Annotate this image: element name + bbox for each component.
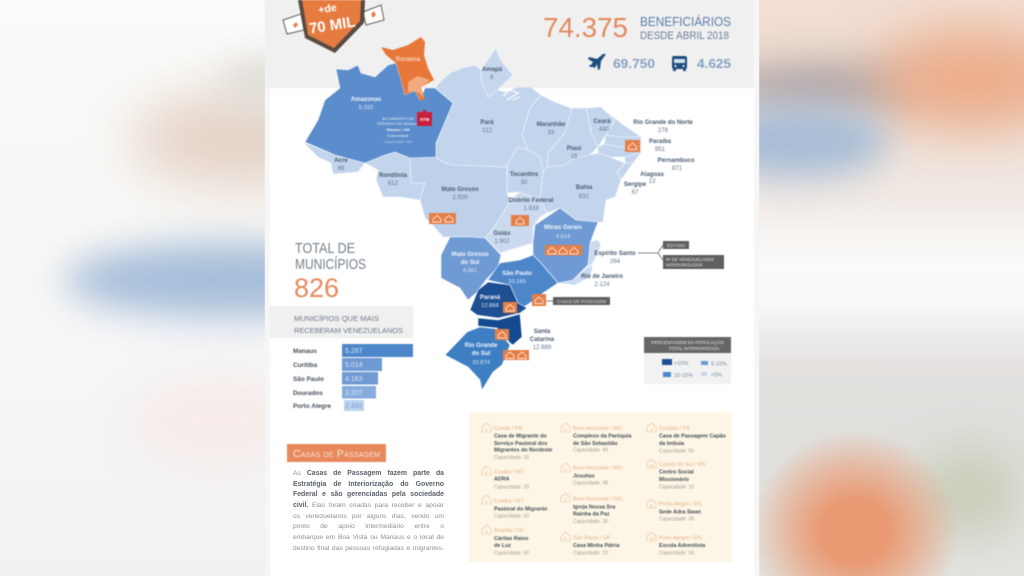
shelter 5: Capacidade: 40 [573,448,608,454]
shelter 7: Belo Horizonte / MG [573,496,623,502]
shelter 7 [561,493,623,525]
shelter 12: Escola Adventista [659,543,706,549]
callout: Manaus shelter: ALOJAMENTO DE [382,117,414,121]
shelter 10: 10 [649,463,654,468]
shelter 9: 9 [650,427,653,432]
shelter 2: Cuiabá / MT [494,469,525,475]
bar: São Paulo: São Paulo [293,376,324,383]
bar: Curitiba [293,358,382,371]
shelter 9: Curitiba / PR [659,426,690,432]
icon: shelter tag Minas Gerais [545,245,582,256]
shelter 8: Capacidade: 20 [573,550,608,556]
state labels: Catarina [530,336,555,343]
bar: Curitiba: 5.014 [345,362,363,369]
shelter 3 [482,495,547,520]
heading: total de municípios [295,240,366,273]
shelter 11: Sede Adra Swan [659,509,701,515]
bar: Manaus: Manaus [293,348,317,355]
shelter 7: Capacidade: 30 [573,519,608,525]
bar: Manaus [293,344,413,357]
shelter 5: de São Sebastião [573,441,618,447]
state labels: 10.874 [472,360,491,366]
bar: Dourados: 3.207 [345,390,363,397]
state labels: Mato Grosso [451,251,489,258]
bar: Manaus: 5.287 [345,348,363,355]
shelter 1 [482,423,552,461]
icon: shelter tag Rio Grande do Sul east [503,350,529,360]
callout: Manaus shelter [377,117,420,144]
shelter 1: Conde / PB [494,426,522,432]
shelter 6: Jesuítas [573,473,595,479]
state labels: 1.902 [494,238,510,245]
headline figure: DESDE ABRIL 2018 [640,30,729,42]
state: São Paulo [488,255,558,308]
legend: percentage of population: PERCENTAGEM DA POPULAÇÃO [651,339,724,345]
state labels: Pará [480,119,494,126]
icon: shelter tag Distrito Federal [511,215,529,226]
state labels: 1.933 [523,205,539,212]
state labels: Tocantins [510,171,539,178]
shelter 3: Pastoral do Migrante [494,507,547,513]
state: Bahia [540,153,625,222]
state labels: Santa [534,328,551,335]
headline figure: 74.375 [543,12,628,43]
state labels: 12.868 [481,303,499,309]
shelter 3: Cuiabá / MT [494,498,525,504]
state: Roraima [381,37,434,100]
state labels: Rio Grande [465,342,498,349]
state labels: 440 [599,126,610,133]
state labels: Espírito Santo [594,250,636,257]
shelter 10: Missionário [659,477,690,483]
shelter 12: 12 [649,536,654,541]
shelter 3: Capacidade: 20 [494,514,529,520]
shelter 5: Belo Horizonte / MG [573,426,623,432]
bar: Porto Alegre [293,400,364,411]
shelter 5: Complexo da Paróquia [573,434,632,440]
state: Tocantins [507,147,543,200]
state labels: Distrito Federal [509,197,554,204]
state labels: Minas Gerais [544,224,583,231]
shelter 2: Capacidade: 20 [494,484,529,490]
subheading strip: MUNICÍPIOS QUE MAIS [294,314,379,323]
shelter 11: Capacidade: 30 [659,517,694,523]
state labels [334,56,695,366]
shelter 1: Migrantes do Nordeste [494,448,552,454]
shelter 3: 3 [485,499,488,504]
bar: São Paulo [293,372,378,384]
shelter 10: Capacidade: 10 [659,484,694,490]
state: Pará [435,65,541,167]
state labels: 812 [388,180,399,187]
state labels: 4.561 [463,268,477,274]
key: state and count tags: ESTADO [667,243,686,248]
state labels: 10.189 [508,279,526,285]
state labels: Sergipe [624,181,647,188]
shelter 2: 2 [485,470,488,475]
shelter 6: Capacidade: 48 [573,480,608,486]
state: Paraíba [604,135,641,147]
state: Maranhão [522,95,574,173]
headline figure [543,12,731,43]
subheading strip: RECEBERAM VENEZUELANOS [294,326,403,335]
shelter 1: 1 [485,427,488,432]
badge: +de 70 mil: +de [318,2,338,16]
state labels: Maranhão [537,121,566,128]
state labels: Rio Grande do Norte [633,119,693,126]
state: Rio Grande do Sul [445,327,510,390]
shelter 6: 6 [564,467,567,472]
legend: percentage of population: TOTAL INTERIORIZADA [669,346,720,351]
callout: Manaus shelter: TRÂNSITO DE MANAUS [377,121,420,126]
shelter 1: Serviço Pastoral dos [494,441,547,447]
state labels: do Sul [472,350,491,357]
text block: casas de passagem description: destino final das pessoas refugiadas e migrantes. [293,545,444,552]
icon: shelter tag São Paulo [532,294,546,306]
heading: casas de passagem [287,444,386,462]
subheading strip [270,306,413,338]
shelter 2: ADRA [494,477,510,483]
state labels: Bahia [576,184,593,191]
state: Pernambuco [598,144,641,157]
state labels: Rio de Janeiro [581,273,623,280]
state labels: Amazonas [351,96,382,103]
shelter 9 [647,423,727,454]
bar chart: top municipalities [293,344,413,411]
state: Rio Grande do Norte [601,107,641,137]
state: Amapá [481,48,513,97]
shelter 1: Casa de Migrante do [494,434,547,440]
state: Espírito Santo [588,240,601,267]
bar: Dourados [293,386,376,398]
icon: shelter tag Paraíba [625,140,640,152]
shelter 4: 4 [485,529,488,534]
panel: list of shelters [469,412,732,562]
headline figure: BENEFICIÁRIOS [640,14,731,29]
bar: Porto Alegre: Porto Alegre [293,403,332,410]
heading: casas de passagem: Casas de Passagem [293,448,380,460]
state labels: São Paulo [502,270,532,277]
legend: percentage of population: 5-10% [711,362,727,368]
state labels: 831 [579,193,590,200]
shelter 7: Igreja Nossa Sra [573,504,616,510]
shelter 6 [561,463,623,486]
state labels: 278 [658,127,669,134]
state: Ceará [586,107,615,147]
text block: casas de passagem description: embarque em Boa Vista ou Manaus e o local de [293,534,444,541]
key: casas de passagem tag [546,297,610,305]
state: Minas Gerais [533,208,598,283]
badge: +de 70 mil: 70 MIL [308,14,357,38]
Roraima flow highlight [408,76,430,98]
state: Goiás [485,192,547,253]
callout: Manaus shelter: Capacidade: 354 [384,140,412,144]
text block: casas de passagem description: As Casas de Passagem fazem parte da [293,470,444,477]
blurred background right [759,0,1024,576]
state labels: 30 [521,179,528,186]
state: Rio de Janeiro [558,265,593,285]
icon: shelter tag Mato Grosso [429,213,456,224]
state labels: 951 [655,146,666,153]
legend: percentage of population: >15% [674,361,688,367]
text block: casas de passagem description: Estratégia de Interiorização do Governo [293,481,444,488]
shelter 8: 8 [564,536,567,541]
state labels: 2.500 [452,194,468,201]
shelter 9: Casa de Passagem Capão [659,434,727,440]
state labels: Mato Grosso [441,186,479,193]
state labels: 12.689 [533,344,552,351]
state: Acre [303,142,365,174]
shelter 12: Porto Alegre / RS [659,535,702,541]
bar: Curitiba: Curitiba [293,362,318,369]
number: 826 municipalities: 826 [294,273,339,303]
bar: São Paulo: 4.163 [345,376,363,383]
state labels: Goiás [494,230,511,237]
shelter 4: Capacidade: 50 [494,550,529,556]
legend: percentage of population [644,337,731,384]
Marajó island detail [503,90,520,100]
icon: airplane [588,54,606,70]
state labels: Alagoas [640,171,664,178]
state: Santa Catarina [478,314,522,345]
bar: Porto Alegre: 2.492 [345,403,363,410]
shelter 10 [647,459,705,490]
icon: bus [672,56,687,71]
state: Amazonas [305,63,453,163]
heading: total de municípios: MUNICÍPIOS [295,256,366,273]
panel: page sheet [265,0,759,576]
shelter 2 [482,466,529,490]
shelter 9: da Imbuia [659,441,685,447]
icon: shelter tag Rio Grande do Sul north [495,329,509,340]
state labels: Paraná [480,294,501,301]
state labels: Piauí [567,145,582,152]
state: Piauí [547,108,598,167]
shelter 9: Capacidade: 50 [659,448,694,454]
text block: casas de passagem description: Federal e são gerenciadas pela sociedade [293,491,444,498]
shelter 1: Capacidade: 30 [494,455,529,461]
shelter 4 [482,525,529,556]
state: Alagoas [625,153,641,163]
state labels: 67 [632,189,639,196]
map of Brazil [303,37,695,390]
shelter 11 [647,499,702,523]
shelter 10: Caxias do Sul / RS [659,462,705,468]
shelter 4: Brasília / DF [494,528,525,534]
shelter 12 [647,532,706,556]
shelter 8: São Paulo / SP [573,535,611,541]
text block: casas de passagem description: os venezuelanos por alguns dias, sendo um [293,513,444,520]
state labels: Paraíba [649,138,672,145]
state labels: 13 [649,178,656,185]
shelter 6: Belo Horizonte / MG [573,466,623,472]
shelter 7: Rainha da Paz [573,512,610,518]
key: state and count tags: Nº DE VENEZUELANOS [666,257,714,262]
state labels: Pernambuco [658,157,695,164]
state labels: 2.124 [594,281,610,288]
heading: total de municípios: TOTAL DE [295,240,355,257]
shelter 10: Centro Social [659,469,694,475]
shelter 5: 5 [564,427,567,432]
shelter 12: Capacidade: 50 [659,550,694,556]
state labels: Ceará [594,118,611,125]
legend: percentage of population: <5% [711,372,722,378]
state labels: 33 [548,129,555,136]
icon: shelter tag Paraná [503,302,517,313]
shelter 7: 7 [564,497,567,502]
state: Mato Grosso do Sul [441,237,501,300]
shelter 11: Porto Alegre / RS [659,502,702,508]
state labels: 5.332 [359,105,373,111]
state labels: 112 [482,127,492,134]
shelter 11: 11 [649,503,654,508]
state labels: Acre [334,157,348,164]
state: Mato Grosso [410,157,510,238]
badge: +de 70 mil [283,0,384,53]
callout: Manaus shelter: Fraternidade [387,134,409,138]
shelter 8 [561,532,620,556]
text block: casas de passagem description: civil. Elas foram criadas para receber e apoiar [293,502,444,509]
state labels: Roraima [396,56,421,63]
state labels: Rondônia [379,172,408,179]
icon: ATM shelter [417,110,432,126]
air count: 69.750 [613,57,655,71]
state: Paraná [470,282,527,318]
state: Sergipe [617,163,633,180]
shelter 4: de Luz [494,543,511,549]
state labels: 4.614 [556,234,571,240]
key: state and count tags: INTERIORIZADOS [666,262,703,268]
legend: percentage of population: 10-15% [674,373,693,379]
bus count: 4.625 [697,57,731,71]
state: Rondônia [365,152,425,200]
state labels: 66 [338,165,345,172]
state labels: 264 [610,258,621,265]
state labels: do Sul [461,259,480,266]
text block: casas de passagem description: ponto de apoio intermediário entre o [293,523,444,530]
shelter 8: Casa Minha Pátria [573,543,620,549]
callout: Manaus shelter: Manaus / AM [386,128,410,132]
state labels: Amapá [482,66,503,73]
shelter 4: Cáritas Raios [494,536,528,542]
state labels: 871 [672,165,683,172]
state labels: 15 [571,153,578,160]
key: state and count tags [638,241,724,269]
key: casas de passagem tag: CASAS DE PASSAGEM [557,299,606,304]
bar: Dourados: Dourados [293,390,323,397]
blurred background left [0,0,265,576]
text block: casas de passagem description [293,470,444,552]
icon: ATM shelter: ATM [420,117,429,122]
shelter 5 [561,423,632,454]
state labels: 6 [490,74,494,81]
